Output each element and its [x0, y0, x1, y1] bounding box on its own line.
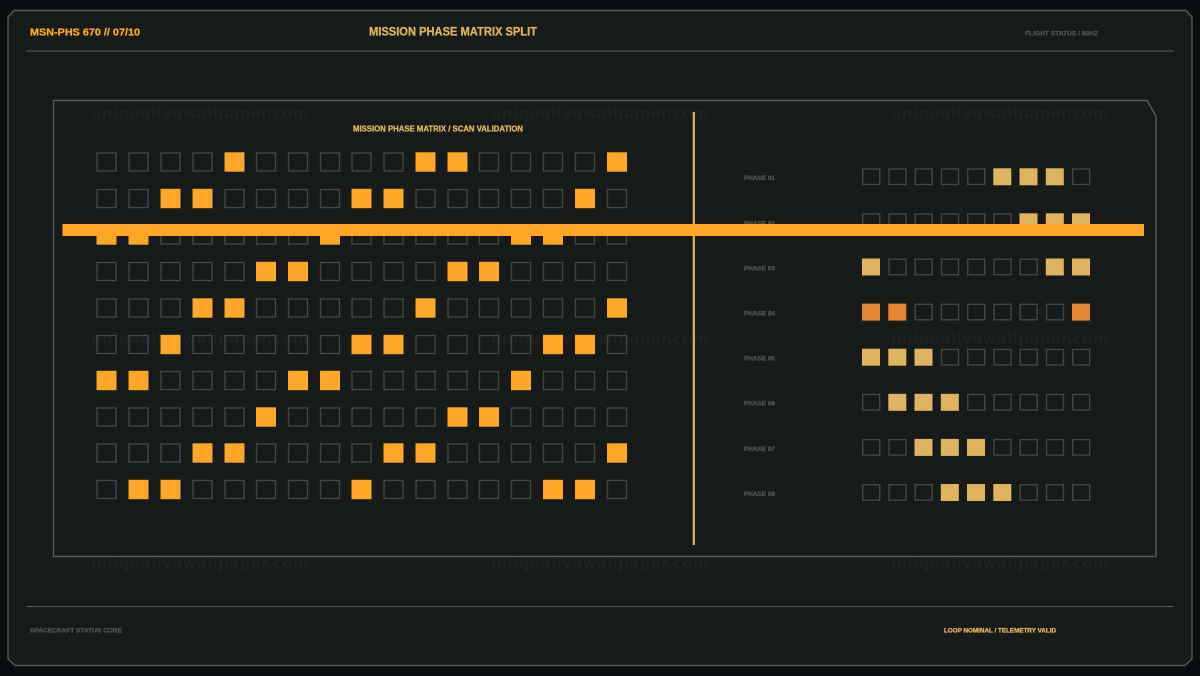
phase 02 row — [744, 213, 1090, 230]
phase 06 row: PHASE 06 — [744, 401, 776, 408]
horizontal scan bar — [62, 224, 1144, 236]
footer left label: SPACECRAFT STATUS CORE — [30, 627, 123, 634]
title: MISSION PHASE MATRIX SPLIT — [369, 24, 538, 38]
watermark: uniquelivewallpaper.com — [491, 330, 709, 348]
phase 08 row: PHASE 08 — [744, 491, 776, 498]
watermark: uniquelivewallpaper.com — [891, 554, 1109, 572]
matrix row 10 — [97, 480, 626, 499]
matrix row 9 — [97, 443, 627, 463]
header code: MSN-PHS 670 // 07/10 — [30, 26, 140, 38]
matrix row 8 — [97, 407, 626, 427]
watermark: uniquelivewallpaper.com — [891, 330, 1109, 348]
scan validation matrix — [96, 152, 627, 499]
watermark: uniquelivewallpaper.com — [491, 104, 709, 122]
phase 05 row: PHASE 05 — [744, 356, 776, 363]
phase 01 row — [744, 168, 1090, 185]
phase 03 row — [744, 258, 1090, 276]
watermark — [91, 104, 1109, 572]
matrix row 5 — [97, 298, 627, 318]
watermark: uniquelivewallpaper.com — [491, 554, 709, 572]
phase 04 row: PHASE 04 — [744, 310, 776, 318]
matrix row 2 — [97, 189, 626, 208]
phase 02 row: PHASE 02 — [744, 220, 776, 227]
phase 07 row — [744, 439, 1090, 456]
watermark: uniquelivewallpaper.com — [891, 104, 1109, 122]
flight status label: FLIGHT STATUS / 60HZ — [1025, 30, 1098, 37]
matrix row 6 — [97, 335, 626, 354]
matrix row 3 — [96, 225, 626, 245]
phase 01 row: PHASE 01 — [744, 175, 776, 182]
phase 03 row: PHASE 03 — [744, 265, 776, 272]
footer right status: LOOP NOMINAL / TELEMETRY VALID — [944, 627, 1056, 634]
matrix row 7 — [96, 371, 626, 390]
matrix row 4 — [97, 262, 626, 281]
watermark: uniquelivewallpaper.com — [91, 330, 309, 348]
footer divider — [26, 606, 1174, 608]
matrix heading: MISSION PHASE MATRIX / SCAN VALIDATION — [353, 124, 523, 134]
watermark: uniquelivewallpaper.com — [91, 554, 309, 572]
main panel — [54, 100, 1156, 556]
phase 06 row — [744, 394, 1090, 411]
phase 05 row — [744, 349, 1090, 366]
header divider — [26, 50, 1174, 52]
matrix row 1 — [97, 152, 627, 172]
phase 04 row — [744, 304, 1090, 321]
watermark: uniquelivewallpaper.com — [91, 104, 309, 122]
phase 07 row: PHASE 07 — [744, 446, 776, 453]
vertical split line — [693, 112, 695, 545]
phase list — [744, 168, 1090, 501]
phase 08 row — [744, 484, 1090, 501]
